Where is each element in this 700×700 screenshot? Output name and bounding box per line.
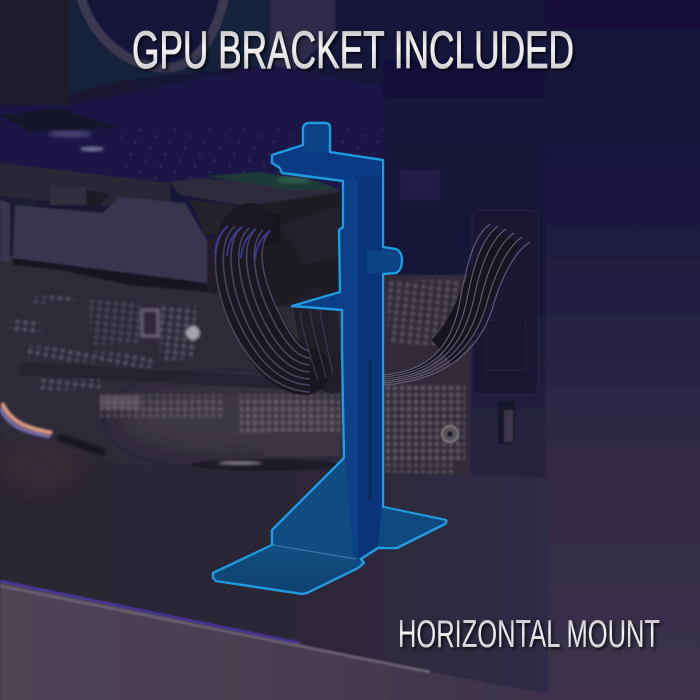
gusset [274, 400, 355, 556]
floor of the case [0, 437, 548, 700]
right cable bundle [384, 224, 530, 385]
rainbow ribbon cable [0, 403, 52, 437]
foot crease [273, 545, 356, 559]
side knob [367, 250, 400, 274]
background: right side panel [383, 0, 700, 700]
bracket silhouette [213, 123, 446, 594]
slot in upright [368, 360, 372, 500]
motherboard [0, 170, 471, 480]
top arm [274, 147, 381, 178]
foot plate [214, 546, 357, 592]
lower case edge [0, 581, 548, 700]
upright column [355, 162, 382, 558]
blue GPU bracket [213, 123, 446, 594]
right foot [384, 508, 445, 547]
power connector [236, 192, 340, 307]
graphics card shroud [0, 163, 340, 300]
top knob [305, 126, 328, 153]
left cable bundle [215, 226, 333, 392]
